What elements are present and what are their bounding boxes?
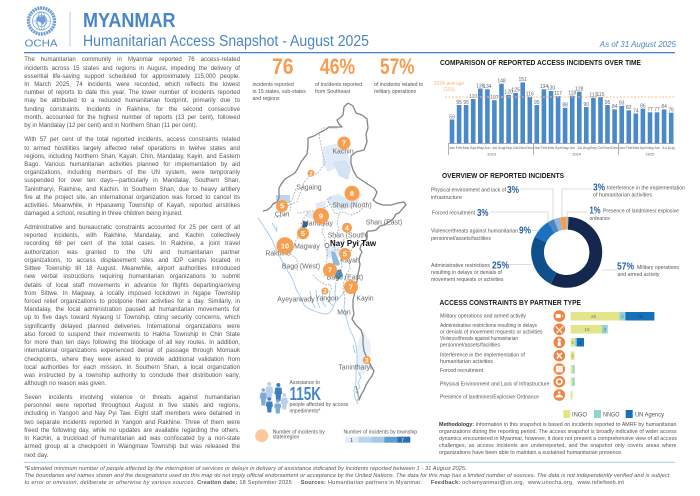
time axis: Feb xyxy=(541,145,547,150)
time axis: May xyxy=(561,145,569,150)
paragraph: violence and threats: including in Yangon and Nay Pyi Taw. Eight staff members were detained in xyxy=(24,411,240,417)
bar values: 84 xyxy=(661,104,667,110)
bar chart: incidents per month xyxy=(434,77,675,156)
map labels: Tanintharyi xyxy=(338,364,372,372)
paragraph: administrative constraints: details of local staff movements in advance for flights departing/arriving xyxy=(24,283,240,289)
donut labels xyxy=(431,186,685,283)
bar values: 86 xyxy=(640,103,646,109)
partner row labels: humanitarian activities xyxy=(440,359,493,365)
donut labels: infrastructure xyxy=(431,195,462,201)
bar values: 136 xyxy=(476,83,485,89)
map labels: Chin xyxy=(275,212,289,218)
donut labels: Forced recruitment xyxy=(432,210,475,216)
legend: bubble size xyxy=(255,429,325,442)
time axis xyxy=(448,144,675,156)
map labels: Shan (East) xyxy=(366,220,402,226)
bar values: 95 xyxy=(456,100,462,106)
bar values: 130 xyxy=(547,86,555,92)
methodology note: Methodology: Information in this snapshot is based on incidents reported to AMRF by humanitarian xyxy=(439,422,676,428)
donut labels: personnel/assets/facilities xyxy=(431,236,491,242)
bar values: 151 xyxy=(519,77,527,83)
KPI: 76 incidents: and regions xyxy=(252,96,280,102)
time axis: Feb xyxy=(625,145,632,150)
map labels: Kayin xyxy=(356,296,374,302)
time axis: Jul xyxy=(577,145,582,150)
township shading xyxy=(276,142,371,377)
KPI: 46% from Southeast: from Southeast xyxy=(315,89,351,95)
KPI: 76 incidents: in 15 states, sub-states xyxy=(252,89,306,95)
paragraph: administrative constraints: also forced to suspend their movements to Hakha Township in Chin State xyxy=(24,332,240,338)
map labels: Sagaing xyxy=(296,184,322,192)
donut labels: resulting in delays or denials of xyxy=(431,270,502,276)
bar values: 93 xyxy=(619,101,625,107)
KPI: 76 incidents xyxy=(252,54,306,102)
bubble values: 5 xyxy=(301,229,305,238)
time axis: Apr xyxy=(640,145,647,150)
bar values: 115 xyxy=(597,92,605,98)
time axis: Aug xyxy=(668,145,675,150)
map labels: Bago (West) xyxy=(282,264,320,270)
paragraph: administrative constraints: authorization was granted to the UN and humanitarian partner xyxy=(24,250,240,256)
methodology note: organizations during the reporting period. The access snapshot is broadly indicative of wider access xyxy=(439,429,676,435)
legend: township colour ramp xyxy=(344,430,417,444)
bar values: 134 xyxy=(483,84,492,90)
bar values: 116 xyxy=(526,91,534,97)
partner row labels: or denials of movement requests or activities xyxy=(440,330,543,336)
country outline xyxy=(348,103,406,400)
KPI: 46% from Southeast: of incidents reported xyxy=(315,82,362,88)
bar values: 74 xyxy=(633,108,639,114)
donut labels: Military operations xyxy=(637,265,679,271)
time axis: May xyxy=(477,145,484,150)
donut labels: movement requests or activities xyxy=(431,277,504,283)
stacked bars by partner type: 4 xyxy=(579,340,582,346)
paragraph: armed hostilities: damaged a school, resulting in three children being injured. xyxy=(24,211,183,217)
donut labels: and armed activity xyxy=(618,272,660,278)
time axis: 2023 xyxy=(487,152,496,156)
paragraph: administrative constraints: local authorities for each mission. In Southern Shan, a local organization xyxy=(24,365,240,371)
footer notes: to error or omission, deliberate or otherwise by various sources. Creation date: 18 September 2025 Sources: Humanitarian partners in Myanmar. Feedback: ochamyanmar@un.org, www.unocha.org, www.reliefweb.int xyxy=(24,480,624,486)
intro paragraph: number of reports to date this year. The lower number of incidents reported xyxy=(24,90,240,96)
bar values: 128 xyxy=(575,86,584,92)
bar values xyxy=(449,77,674,120)
paragraph: administrative constraints: from Sittwe. In Magway, a locally imposed lockdown in Ngape Township xyxy=(24,291,240,297)
time axis: Jan xyxy=(619,145,625,150)
KPI: 46% from Southeast xyxy=(315,54,362,95)
incident count bubbles xyxy=(276,136,371,364)
methodology note: organizations have been able to maintain a sustained humanitarian presence. xyxy=(439,450,623,456)
paragraph: violence and threats: personnel were reported throughout August in five states and regions, xyxy=(24,403,240,409)
bubble values: 2 xyxy=(323,289,327,295)
time axis: Feb xyxy=(456,145,462,150)
time axis: Jun xyxy=(654,145,660,150)
subtitle: Humanitarian Access Snapshot - August 2025 xyxy=(83,33,369,50)
partner legend: INGO xyxy=(572,412,587,418)
bar values: 77 xyxy=(647,107,653,113)
intro paragraph: by in Mandalay (12 per cent) and in Northern Shan (11 per cent). xyxy=(24,123,197,129)
donut labels: ordnance xyxy=(590,216,610,222)
paragraph: violence and threats: next day. xyxy=(24,453,48,459)
callout: 115K people affected: 115K xyxy=(290,384,321,404)
chart heading: COMPARISON OF REPORTED ACCESS INCIDENTS OVER TIME xyxy=(440,58,641,67)
leader lines xyxy=(490,189,617,270)
title: MYANMAR xyxy=(83,9,176,32)
legend: bubble size: state/region xyxy=(273,435,299,441)
partner row labels: Administrative restrictions resulting in delays xyxy=(440,323,537,329)
time axis: Nov xyxy=(519,145,526,150)
partner row labels: Interference in the implementation of xyxy=(440,352,525,358)
coast and delta xyxy=(258,218,361,404)
stacked bars by partner type: 2 xyxy=(571,340,574,346)
KPI: 76 incidents: incidents reported xyxy=(252,82,294,88)
donut percentages: 1% xyxy=(590,206,601,216)
time axis: Jul xyxy=(662,145,667,150)
KPI: 57% military: 57% xyxy=(380,54,414,79)
map labels: Mon xyxy=(337,310,351,316)
stacked bars by partner type: 3 xyxy=(621,314,624,320)
intro paragraph: may be attributed to a reduced humanitarian footprint, primarily due to xyxy=(24,98,240,104)
time axis: 2025 xyxy=(646,152,654,156)
KPI: 46% from Southeast: 46% xyxy=(320,54,355,79)
time axis: Jun xyxy=(569,145,575,150)
map of Myanmar xyxy=(258,103,406,404)
map labels: Kayah xyxy=(340,258,360,264)
bar values: 113 xyxy=(589,93,598,99)
paragraph: armed hostilities: regions, including Northern Shan, Kayah, Chin, Mandalay, Kayin, and Eastern xyxy=(24,154,240,160)
paragraph: administrative constraints: checkpoints, where they were asked to provide additional validation from xyxy=(24,356,240,362)
paragraph: administrative constraints: was instructed by a township authority to conclude their distribution early, xyxy=(24,373,240,379)
donut percentages xyxy=(477,182,634,272)
header divider xyxy=(70,12,71,46)
intro paragraph xyxy=(24,56,240,129)
stacked bars by partner type: 3 xyxy=(603,327,606,333)
donut labels: Physical environment and lack of xyxy=(431,188,506,194)
paragraph: armed hostilities: suspended for over ten days—particularly in Mandalay, Southern Shan, xyxy=(24,178,240,184)
legend: township colour ramp: 7 xyxy=(401,438,404,444)
bar values: 88 xyxy=(562,103,568,109)
paragraph: armed hostilities: to armed hostilities largely affected relief operations in twelve states and xyxy=(24,146,240,152)
paragraph: violence and threats: armed group at a checkpoint in Waingmaw Township but was released the xyxy=(24,444,240,450)
paragraph: administrative constraints: organizations, to access displacement sites and IDP camps located in xyxy=(24,258,240,264)
2024 average line xyxy=(434,81,675,97)
donut percentages: 3% xyxy=(477,208,489,219)
bubble values: 7 xyxy=(349,283,353,292)
map labels: Kachin xyxy=(332,148,354,156)
partner row labels: personnel/assets/facilities xyxy=(440,342,500,348)
paragraph: administrative constraints: although no reason was given. xyxy=(24,381,106,387)
partner legend: UN Agency xyxy=(635,412,665,418)
time axis: Mar xyxy=(463,145,470,150)
map labels: Shan (South) xyxy=(328,232,368,240)
bar values: 90 xyxy=(584,102,589,108)
bar values: 84 xyxy=(612,104,618,110)
time axis: Jul xyxy=(492,145,497,150)
capital marker: Nay Pyi Taw: Nay Pyi Taw xyxy=(330,239,377,248)
legend: township colour ramp: Number of incidents by township xyxy=(344,430,417,436)
donut labels: of humanitarian activities xyxy=(593,192,652,198)
paragraph: administrative constraints: Sittwe Township till 18 August. Meanwhile, airport authorities introduced xyxy=(24,266,240,272)
bar values: 59 xyxy=(449,114,455,120)
donut labels: Violence/threats against humanitarian xyxy=(431,228,518,234)
bar values: 82 xyxy=(626,105,632,111)
partner row labels: Physical Environment and Lack of Infrastructure xyxy=(440,381,550,387)
time axis: Apr xyxy=(555,145,562,150)
bar values: 95 xyxy=(463,100,469,106)
bar values: 134 xyxy=(540,84,548,90)
bubble values: 4 xyxy=(345,225,349,232)
stacked bars by partner type xyxy=(571,312,654,400)
donut labels: Presence of landmines/ explosive xyxy=(603,208,679,214)
partner legend xyxy=(563,410,665,418)
bar values: 118 xyxy=(568,90,576,96)
stacked bars by partner type: 25 xyxy=(591,314,596,320)
bar values: 107 xyxy=(490,95,499,101)
legend: bubble size: Number of incidents by xyxy=(273,430,325,436)
donut percentages: 9% xyxy=(519,226,531,236)
partner type heading: ACCESS CONSTRAINTS BY PARTNER TYPE xyxy=(440,298,581,307)
time axis: Nov xyxy=(604,145,611,150)
overview heading: OVERVIEW OF REPORTED INCIDENTS xyxy=(442,171,564,180)
2024 average line: (115) xyxy=(443,87,455,93)
map labels: Yangon xyxy=(315,296,339,302)
paragraph: armed hostilities xyxy=(24,136,240,217)
time axis: Mar xyxy=(632,145,640,150)
KPI: 57% military: of incidents related to xyxy=(374,82,423,88)
donut percentages: 3% xyxy=(593,182,605,194)
methodology note xyxy=(439,422,677,456)
footer notes: *Estimated minimum number of people affected by the interruption of services or delays in delivery of assistance indicated by incidents reported between 1 - 31 August 2025. xyxy=(24,466,467,472)
map labels: Shan (North) xyxy=(332,202,372,210)
paragraph: administrative constraints: Mandalay, the local administration paused all humanitarian movements for xyxy=(24,307,240,313)
donut labels: Interference in the implementation xyxy=(607,186,685,192)
bubble values: 5 xyxy=(280,202,284,211)
paragraph: administrative constraints: reported incidents, with Rakhine, Mandalay, and Kachin collectively xyxy=(24,233,240,239)
bar values: 77 xyxy=(654,107,660,113)
intro paragraph: The humanitarian community in Myanmar reported 76 access-related xyxy=(24,57,240,63)
time axis: May xyxy=(646,145,654,150)
time axis: Oct xyxy=(513,145,520,150)
time axis: Sep xyxy=(505,145,512,150)
bubble values: 8 xyxy=(350,189,354,198)
date stamp: As of 31 August 2025 xyxy=(599,40,677,49)
intro paragraph: month, accounted for the highest number of reports (13 per cent), followed xyxy=(24,115,240,121)
map labels: Mandalay xyxy=(303,220,333,228)
paragraph: violence and threats: In Kachin, a truckload of humanitarian aid was confiscated by a non-state xyxy=(24,436,240,442)
bar values: 117 xyxy=(554,91,562,97)
time axis: Jan xyxy=(534,145,540,150)
bar values: 148 xyxy=(497,78,506,84)
paragraph: armed hostilities: With 57 per cent of the total reported incidents, access constraints related xyxy=(24,137,240,143)
KPI: 57% military xyxy=(374,54,423,95)
partner row icons xyxy=(554,310,565,401)
paragraph: armed hostilities: fire at the project site, an international organization was forced to cancel its xyxy=(24,195,240,201)
footer notes: The boundaries and names shown and the designations used on this map do not imply official endorsement or acceptance by the United Nations. The data for this map has a limited number of sources. The data is not independently verified and is subject xyxy=(24,473,669,479)
bar values: 125 xyxy=(511,88,520,94)
stacked bars by partner type: 15 xyxy=(637,314,643,320)
time axis: Jan xyxy=(449,145,455,150)
partner row labels xyxy=(440,314,550,400)
bubble values: 7 xyxy=(328,266,332,275)
2024 average line: 2024 average xyxy=(434,81,465,87)
donut percentages: 57% xyxy=(617,262,634,272)
methodology note: challenges, as access incidents are underreported, and the snapshot only covers areas where xyxy=(439,443,676,449)
intro paragraph: In March 2025, 74 incidents were recorded, which reflects the lowest xyxy=(24,82,240,88)
paragraph: armed hostilities: activities. Meanwhile, in Hpasawng Township of Kayah, reported airstrikes xyxy=(24,203,240,209)
paragraph: violence and threats xyxy=(24,394,240,459)
paragraph: administrative constraints: up to five days toward Nyaung U Township, citing security concerns, which xyxy=(24,315,240,321)
time axis: 2024 xyxy=(572,152,582,156)
time axis: Aug xyxy=(498,145,505,150)
paragraph: administrative constraints: significantly delayed planned deliveries. International organizations were xyxy=(24,324,240,330)
time axis: Sep xyxy=(590,145,597,150)
partner row labels: Forced recruitment xyxy=(440,368,483,374)
paragraph: administrative constraints: new verbal instructions requiring humanitarian organizations to submit xyxy=(24,274,240,280)
paragraph: administrative constraints: recording 68 per cent of the total cases. In Rakhine, a joint travel xyxy=(24,241,240,247)
bar values: 95 xyxy=(605,100,610,106)
bar values: 120 xyxy=(504,90,513,96)
paragraph: violence and threats: freed the following day, while no updates are available regarding the others. xyxy=(24,428,240,434)
callout: 115K people affected: people affected by access xyxy=(290,402,349,408)
paragraph: armed hostilities: organizations, including members of the UN system, were temporarily xyxy=(24,170,240,176)
bar values: 110 xyxy=(469,94,477,100)
paragraph: armed hostilities: Tanintharyi, Rakhine, and Kachin. In Southern Shan, due to heavy artillery xyxy=(24,187,240,193)
footer rule xyxy=(24,462,675,463)
paragraph: administrative constraints xyxy=(24,224,240,387)
methodology note: dynamics encountered in Myanmar, however, it does not present a comprehensive view of all access xyxy=(439,436,677,442)
time axis: Oct xyxy=(597,145,604,150)
bubble values: 5 xyxy=(343,250,347,259)
paragraph: administrative constraints: international organizations experienced denial of passage through Momauk xyxy=(24,348,240,354)
donut percentages: 3% xyxy=(507,185,519,196)
bar values: 95 xyxy=(534,100,540,106)
partner row labels: Presence of landmines/Explosive Ordnance xyxy=(440,394,539,400)
paragraph: administrative constraints: forced relief organizations to postpone their activities for a day. Similarly, in xyxy=(24,299,240,305)
bar values: 76 xyxy=(668,108,674,114)
KPI: 76 incidents: 76 xyxy=(272,54,294,79)
time axis: Dec xyxy=(611,145,618,150)
KPI: 57% military: military operations xyxy=(374,89,416,95)
map labels xyxy=(265,148,402,372)
callout: 115K people affected: Assistance to xyxy=(290,380,320,386)
donut chart xyxy=(527,212,607,292)
icon: people xyxy=(260,382,288,414)
partner row labels: Military operations and armed activity xyxy=(440,314,526,320)
map labels: Bago (East) xyxy=(327,274,363,282)
map labels: Ayeyarwady xyxy=(277,296,315,304)
intro paragraph: incidents across 15 states and regions in August, impeding the delivery of xyxy=(24,66,240,72)
time axis: Apr xyxy=(470,145,477,150)
donut labels: Administrative restrictions xyxy=(431,263,490,269)
time axis: Jun xyxy=(484,145,491,150)
bubble values: 3 xyxy=(365,357,369,364)
paragraph: administrative constraints: for more than ten days following the blockage of all key routes. In addition, xyxy=(24,340,240,346)
state boundaries xyxy=(274,128,364,317)
callout: 115K people affected: impediments* xyxy=(290,409,320,415)
time axis: Mar xyxy=(548,145,555,150)
bubble values: 2 xyxy=(309,171,313,177)
legend: township colour ramp: 1 xyxy=(350,438,353,444)
bubble values: 9 xyxy=(319,212,323,221)
partner legend: NNGO xyxy=(603,412,620,418)
time axis: Aug xyxy=(583,145,590,150)
paragraph: violence and threats: two separate incidents reported in Yangon and Rakhine. Three of them were xyxy=(24,420,240,426)
header rule xyxy=(24,52,675,53)
stacked bars by partner type: 2 xyxy=(571,354,574,360)
bubble values: 10 xyxy=(281,241,289,250)
bubble values: 7 xyxy=(342,139,346,148)
footer notes xyxy=(24,466,670,486)
paragraph: administrative constraints: Administrative and bureaucratic constraints accounted for 25 per cent of all xyxy=(24,225,240,231)
map labels: Rakhine xyxy=(265,250,291,258)
callout: 115K people affected xyxy=(290,380,349,415)
donut percentages: 25% xyxy=(492,260,509,272)
intro paragraph: essential life-saving support scheduled for approximately 115,000 people. xyxy=(24,74,240,80)
partner row labels: Violence/threats against humanitarian xyxy=(440,336,518,342)
stacked bars by partner type: 16 xyxy=(584,327,590,333)
paragraph: armed hostilities: Bago. Various humanitarian activities planned for implementation by aid xyxy=(24,162,240,168)
OCHA wordmark: OCHA xyxy=(24,38,58,50)
intro paragraph: funding constraints. Incidents in Rakhine, for the second consecutive xyxy=(24,107,240,113)
map labels: Magway xyxy=(294,244,320,250)
bubble values xyxy=(280,139,369,364)
time axis: Dec xyxy=(526,145,533,150)
icon: OCHA UN emblem logo xyxy=(28,8,54,34)
paragraph: violence and threats: Seven incidents involving violence or threats against humanitarian xyxy=(24,395,240,401)
